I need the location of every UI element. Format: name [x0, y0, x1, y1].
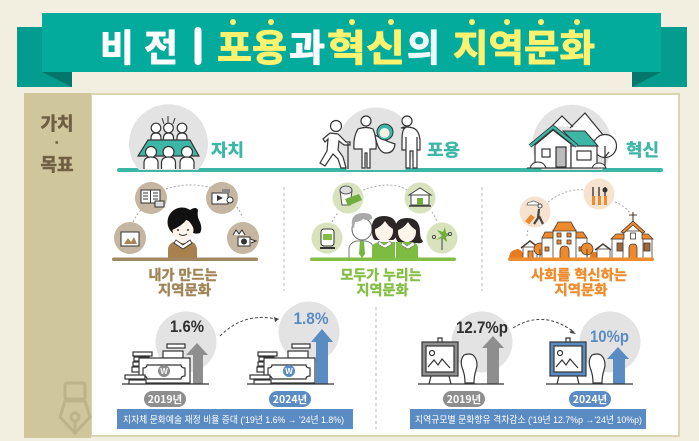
baseline — [508, 258, 654, 261]
label: innovation: 혁신 — [626, 136, 659, 161]
section rule — [117, 168, 663, 172]
chart: gap 2024 — [546, 312, 640, 384]
panel: white content — [91, 94, 679, 436]
badge: 2019 left: 2019년 — [148, 392, 182, 407]
sidebar label: · — [55, 135, 59, 150]
column dividers — [284, 187, 482, 291]
title: 지역문화 — [453, 28, 595, 69]
icon: book — [135, 182, 167, 214]
icon: museum — [404, 182, 436, 214]
caption bar: budget — [117, 409, 353, 429]
icon: traveler — [520, 196, 550, 228]
icon: self-governance — [129, 104, 208, 170]
value: 12.7%p — [456, 319, 508, 337]
baseline — [112, 258, 258, 261]
chart: budget 2019: W — [160, 367, 168, 376]
icon: video — [206, 182, 238, 214]
icon: popcorn ticket — [332, 182, 364, 214]
sidebar label — [40, 114, 74, 175]
value: 1.8% — [294, 310, 329, 328]
caption: creator: 지역문화 — [158, 282, 211, 298]
icon: fountain pen — [60, 383, 90, 433]
caption: innovative — [531, 267, 627, 298]
icon: train — [312, 222, 342, 254]
caption: shared: 지역문화 — [356, 282, 409, 298]
caption: shared: 모두가 누리는 — [340, 267, 422, 283]
title: 포용 — [217, 28, 287, 69]
value: 10%p — [590, 328, 629, 346]
caption bar: cultural gap: 지역규모별 문화향유 격차감소 ('19년 12.7%p →'24년 10%p) — [415, 414, 642, 426]
title: 혁신 — [327, 28, 405, 69]
divider lower — [375, 307, 377, 429]
icon: innovation house — [527, 105, 616, 170]
title: 과 — [289, 28, 325, 69]
sidebar label: 목표 — [40, 155, 74, 175]
caption: creator — [148, 267, 218, 298]
chart: budget 2019 — [122, 312, 216, 384]
person: woman — [168, 208, 201, 258]
arrowhead — [570, 329, 576, 334]
illustration: shared column — [310, 182, 458, 261]
icon: pinwheel — [426, 222, 458, 254]
title banner — [17, 13, 687, 87]
caption: innovative: 사회를 혁신하는 — [531, 267, 627, 283]
title: 의 — [407, 28, 440, 69]
caption bar: cultural gap — [410, 409, 646, 429]
arrow: budget trend — [220, 317, 276, 336]
chart: budget 2024: W — [285, 367, 293, 376]
caption: shared — [340, 267, 422, 298]
caption: creator: 내가 만드는 — [148, 267, 218, 283]
illustration: creator column — [112, 182, 259, 261]
town buildings — [509, 212, 653, 259]
value: 1.6% — [170, 318, 204, 336]
icon: picture — [114, 222, 146, 254]
badge: 2024 left: 2024년 — [273, 392, 307, 407]
icon: cutlery — [584, 178, 614, 210]
caption bar: budget: 지자체 문화예술 재정 비율 증대 ('19년 1.6% → '24년 1.8%) — [123, 415, 344, 426]
badge: 2024 right: 2024년 — [573, 392, 607, 407]
icon: camera — [227, 222, 259, 254]
chart: budget 2024 — [247, 302, 340, 384]
label: inclusion: 포용 — [427, 136, 460, 161]
chart: gap 2019 — [418, 312, 512, 384]
label: self-governance: 자치 — [211, 136, 244, 161]
title: 비 전 — [100, 28, 178, 69]
caption: innovative: 지역문화 — [554, 282, 608, 298]
icon: inclusion family — [320, 107, 420, 170]
badge: 2019 right: 2019년 — [447, 392, 481, 407]
title — [100, 19, 595, 69]
people: man and two women — [349, 213, 423, 258]
sidebar label: 가치 — [40, 114, 74, 134]
panel: value and goal sidebar — [24, 93, 91, 438]
arrow: gap trend — [513, 319, 574, 332]
illustration: innovative town — [508, 178, 654, 261]
baseline — [310, 258, 456, 261]
arrowhead — [274, 317, 279, 322]
